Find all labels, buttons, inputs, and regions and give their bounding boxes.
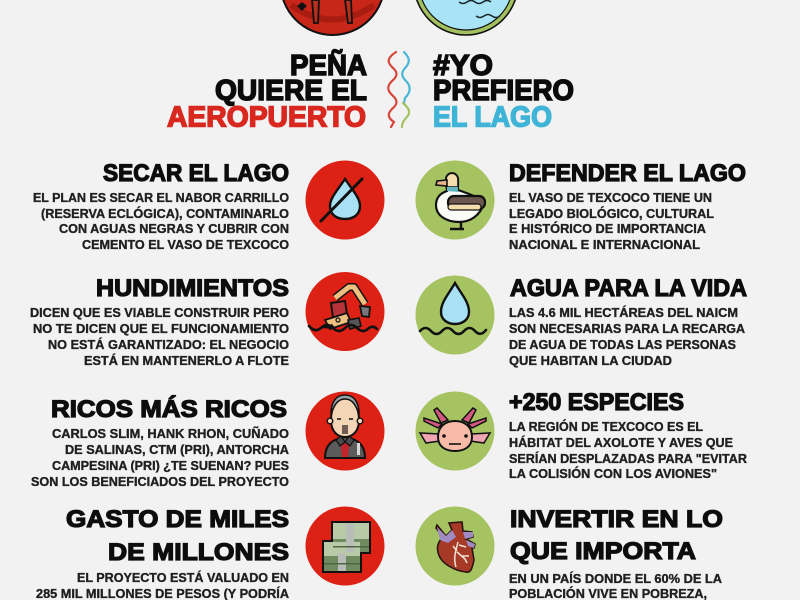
- icon: water drop over waves: [416, 276, 494, 354]
- title: right: EL LAGO: [433, 102, 552, 134]
- panel: ricos más ricos: CAMPESINA (PRI) ¿TE SUENAN? PUES: [52, 459, 289, 473]
- icon: lake emblem (blue circle with green ring, cropped at top): [414, 0, 518, 35]
- panel: gasto de miles de millones: DE MILLONES: [108, 539, 289, 566]
- panel: invertir en lo que importa: QUE IMPORTA: [510, 538, 696, 565]
- panel: hundimientos: HUNDIMIENTOS: [96, 275, 289, 302]
- icon: axolotl: [416, 392, 494, 470]
- panel: defender el lago: NACIONAL E INTERNACIONAL: [509, 238, 700, 252]
- panel: secar el lago: SECAR EL LAGO: [103, 160, 289, 187]
- panel: +250 especies: LA COLISIÓN CON LOS AVIONES": [509, 466, 717, 481]
- icon: crossed-out water drop: [306, 160, 384, 240]
- icon: stacks of money: [306, 506, 384, 586]
- icon: businessman: [306, 392, 384, 470]
- icon: airport emblem (red circle, cropped at top): [280, 0, 384, 35]
- panel: agua para la vida: AGUA PARA LA VIDA: [510, 275, 747, 302]
- panel: secar el lago: CON AGUAS NEGRAS Y CUBRIR CON: [59, 222, 289, 236]
- icon: duck: [416, 160, 494, 240]
- panel: agua para la vida: LAS 4.6 MIL HECTÁREAS DEL NAICM: [509, 305, 738, 320]
- panel: +250 especies: LA REGIÓN DE TEXCOCO ES EL: [509, 419, 703, 434]
- panel: defender el lago: EL VASO DE TEXCOCO TIENE UN: [509, 191, 712, 205]
- panel: invertir en lo que importa: EN UN PAÍS DONDE EL 60% DE LA: [509, 571, 722, 586]
- panel: hundimientos: ESTÁ EN MANTENERLO A FLOTE: [84, 353, 289, 368]
- title: right: #YO: [433, 50, 493, 82]
- title: left: PEÑA: [290, 48, 367, 82]
- panel: hundimientos: NO ESTÁ GARANTIZADO: EL NEGOCIO: [48, 337, 289, 352]
- panel: agua para la vida: QUE HABITAN LA CIUDAD: [509, 354, 672, 368]
- panel: secar el lago: (RESERVA ECLÓGICA), CONTAMINARLO: [41, 206, 289, 221]
- panel: invertir en lo que importa: INVERTIR EN LO: [510, 506, 723, 533]
- panel: ricos más ricos: RICOS MÁS RICOS: [51, 395, 287, 423]
- panel: hundimientos: [30, 275, 289, 368]
- title: left: [167, 48, 367, 134]
- panel: secar el lago: CEMENTO EL VASO DE TEXCOCO: [82, 238, 289, 252]
- panel: secar el lago: [33, 160, 289, 252]
- title: left: AEROPUERTO: [167, 102, 366, 134]
- panel: invertir en lo que importa: [509, 506, 723, 600]
- panel: gasto de miles de millones: EL PROYECTO ESTÁ VALUADO EN: [77, 570, 289, 585]
- panel: hundimientos: NO TE DICEN QUE EL FUNCIONAMIENTO: [33, 322, 289, 336]
- panel: defender el lago: E HISTÓRICO DE IMPORTANCIA: [509, 221, 706, 236]
- panel: ricos más ricos: [31, 395, 289, 489]
- panel: +250 especies: [509, 389, 747, 481]
- panel: agua para la vida: DE AGUA DE TODAS LAS PERSONAS: [509, 338, 736, 352]
- title: right: [433, 50, 574, 134]
- title: left: QUIERE EL: [215, 75, 367, 107]
- panel: ricos más ricos: DE SALINAS, CTM (PRI), ANTORCHA: [65, 443, 289, 457]
- panel: defender el lago: LEGADO BIOLÓGICO, CULTURAL: [509, 206, 714, 221]
- icon: anatomical heart: [416, 506, 494, 586]
- panel: ricos más ricos: CARLOS SLIM, HANK RHON, CUÑADO: [52, 426, 289, 441]
- icon: sinking excavator: [306, 272, 384, 351]
- title: right: PREFIERO: [433, 75, 574, 107]
- panel: +250 especies: +250 ESPECIES: [509, 389, 684, 416]
- panel: ricos más ricos: SON LOS BENEFICIADOS DEL PROYECTO: [31, 475, 289, 489]
- panel: agua para la vida: [509, 275, 747, 368]
- panel: gasto de miles de millones: GASTO DE MILES: [66, 506, 289, 533]
- panel: agua para la vida: SON NECESARIAS PARA LA RECARGA: [509, 322, 745, 336]
- panel: secar el lago: EL PLAN ES SECAR EL NABOR CARRILLO: [33, 191, 289, 205]
- panel: +250 especies: SERÍAN DESPLAZADAS PARA "EVITAR: [509, 451, 747, 466]
- panel: hundimientos: DICEN QUE ES VIABLE CONSTRUIR PERO: [30, 306, 289, 320]
- panel: defender el lago: [509, 160, 746, 252]
- panel: gasto de miles de millones: [36, 506, 289, 600]
- panel: +250 especies: HÁBITAT DEL AXOLOTE Y AVES QUE: [509, 435, 733, 450]
- divider: wavy lines: [388, 52, 410, 127]
- panel: defender el lago: DEFENDER EL LAGO: [509, 160, 746, 187]
